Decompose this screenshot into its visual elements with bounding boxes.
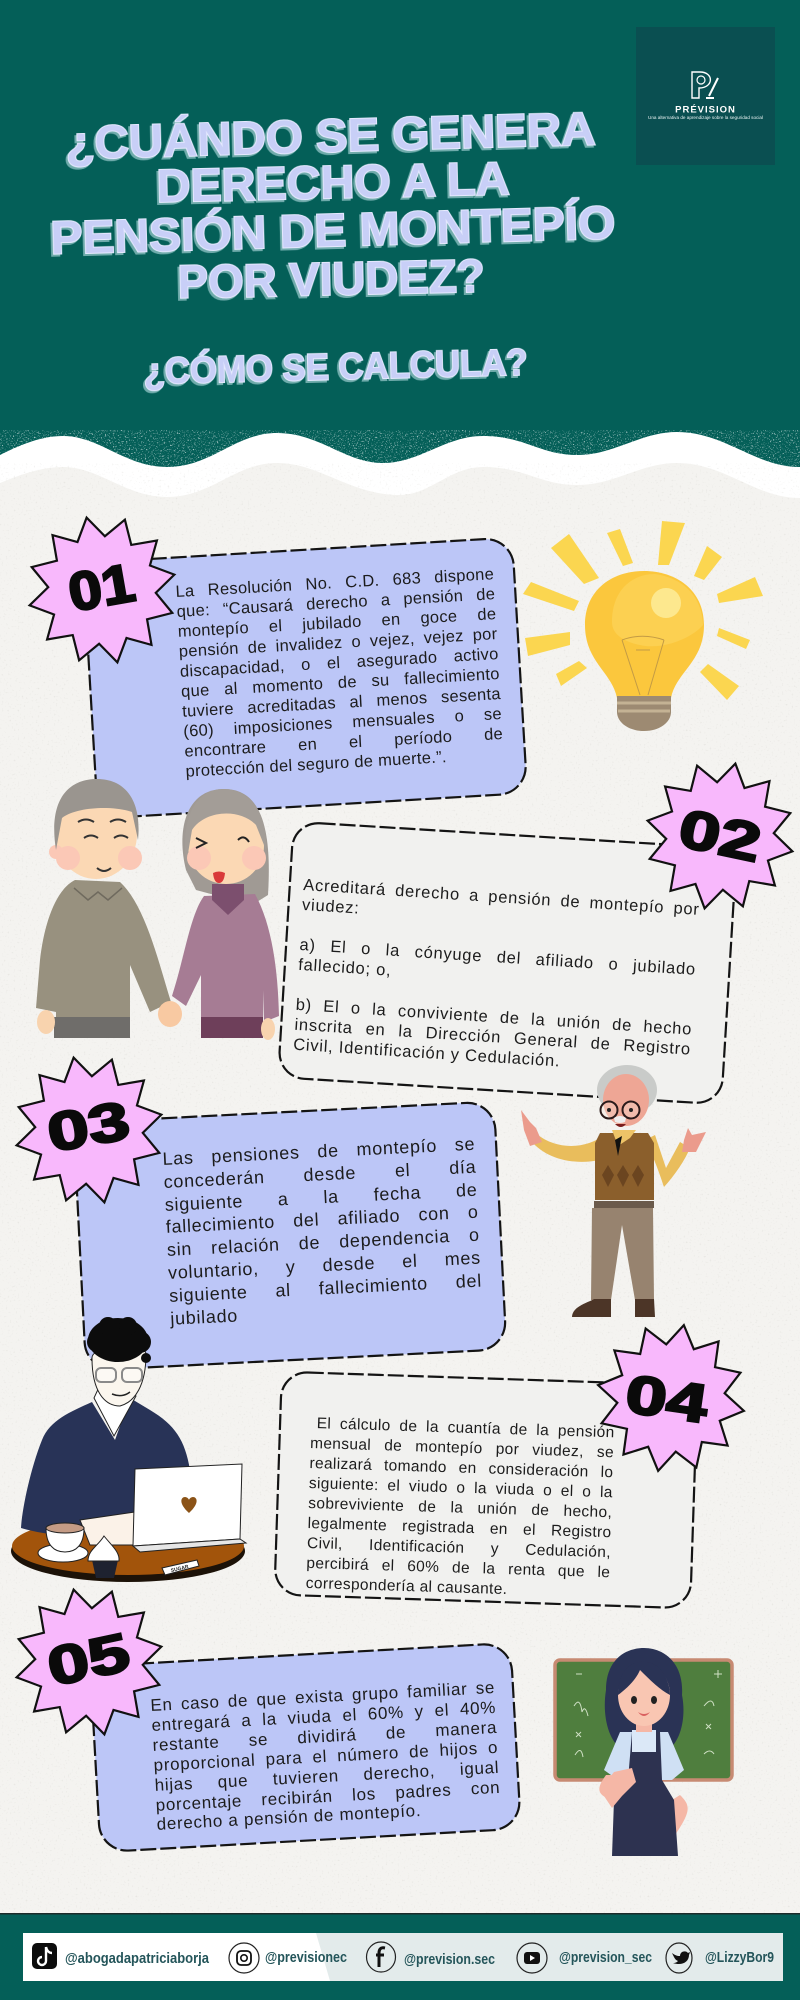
text: card 01: que: “Causará derecho a pensión de (176, 585, 496, 621)
panel: card 05 (92, 1643, 520, 1852)
twitter (666, 1943, 774, 1973)
illustration: man at laptop (11, 1317, 248, 1582)
text: card 01: encontrare en el período de (184, 725, 503, 761)
number 02: 02 (674, 798, 766, 874)
illustration: professor (521, 1065, 706, 1317)
logo: Prévision: PRÉVISION (675, 104, 736, 116)
illustration: man at laptop: SUGAR (170, 1564, 190, 1574)
text: card 05: entregará a la viuda el 60% y el 40% (151, 1697, 497, 1734)
star badge 03 (14, 1056, 164, 1204)
logo: Prévision (636, 27, 775, 165)
number 05: 05 (42, 1622, 135, 1698)
text: card 03: Las pensiones de montepío se (162, 1133, 476, 1169)
star badge 05 (14, 1588, 164, 1736)
text: card 01: montepío el jubilado en goce de (177, 605, 497, 641)
text: card 02: fallecido; o, (298, 955, 392, 979)
text: card 03: sin relación de dependencia o (167, 1224, 480, 1260)
instagram: @previsionec (265, 1949, 347, 1966)
illustration: teacher at chalkboard (553, 1648, 734, 1856)
text: card 01: protección del seguro de muerte.”. (185, 748, 447, 781)
text: card 03: fallecimiento del afiliado con o (165, 1202, 479, 1237)
text: card 02: b) El o la conviviente de la unión de hecho (295, 995, 693, 1038)
twitter: @LizzyBor9 (705, 1949, 774, 1966)
youtube (517, 1943, 652, 1973)
text: card 02: viudez: (302, 895, 360, 917)
text: card 04: Civil, Identificación y Cedulación, (306, 1535, 611, 1561)
text: card 04: realizará tomando en consideración lo (309, 1455, 613, 1481)
text: card 02: Acreditará derecho a pensión de montepío por (303, 875, 700, 918)
text: card 01: pensión de invalidez o vejez, vejez por (178, 625, 498, 661)
man (36, 779, 182, 1038)
icon: light bulb with rays (523, 521, 763, 731)
title (50, 102, 616, 394)
text: card 02: Civil, Identificación y Cedulación. (293, 1035, 561, 1070)
text: card 04: sobreviviente de la unión de hecho, (308, 1495, 612, 1521)
text: card 05: En caso de que exista grupo familiar se (150, 1677, 496, 1714)
text: card 01: que al momento de su fallecimiento (181, 665, 500, 701)
star badge 04 (596, 1323, 746, 1473)
text: card 04 (305, 1415, 614, 1598)
text: card 05: porcentaje recibirán los padres con (155, 1777, 501, 1814)
facebook: @prevision.sec (404, 1951, 495, 1968)
woman (172, 789, 279, 1040)
logo: Prévision: Una alternativa de aprendizaje sobre la seguridad social (648, 115, 763, 120)
star badge 02 (646, 762, 794, 910)
text: card 01 (175, 565, 503, 781)
text: card 05: restante se dividirá de manera (152, 1717, 498, 1754)
title: ¿CUÁNDO SE GENERA (65, 102, 596, 169)
number 03: 03 (43, 1090, 134, 1164)
text: card 04: mensual de montepío por viudez, se (309, 1435, 614, 1461)
text: card 01: tuviere acreditadas al menos sesenta (182, 685, 501, 721)
star badge 01 (28, 516, 176, 664)
text: card 05 (150, 1677, 501, 1834)
text: card 04: siguiente: el viudo o la viuda o el o la (308, 1475, 612, 1501)
text: card 04: percibirá el 60% de la renta que le (306, 1555, 610, 1581)
text: card 02 (293, 875, 700, 1070)
text: card 02: a) El o la cónyuge del afiliado o jubilado (299, 935, 696, 978)
text: card 01: discapacidad, o el asegurado activo (180, 645, 499, 681)
number 04: 04 (622, 1364, 712, 1435)
text: card 05: hijas que tuvieren derecho, igual (154, 1757, 500, 1794)
text: card 01: (60) imposiciones mensuales o se (183, 705, 502, 741)
number 01: 01 (64, 553, 139, 623)
tiktok (32, 1943, 210, 1969)
text: card 04: legalmente registrada en el Registro (307, 1515, 611, 1541)
text: card 03: voluntario, y desde el mes (168, 1247, 481, 1282)
text: card 03: siguiente al fallecimiento del (169, 1270, 482, 1305)
title: DERECHO A LA (156, 152, 510, 212)
panel: card 03 (76, 1102, 506, 1368)
footer: social media bar (0, 1913, 800, 2000)
instagram (229, 1943, 347, 1973)
text: card 05: proporcional para el número de hijos o (153, 1737, 499, 1774)
title: POR VIUDEZ? (177, 250, 485, 308)
panel: card 01 (87, 538, 527, 818)
tiktok: @abogadapatriciaborja (65, 1950, 210, 1967)
youtube: @prevision_sec (559, 1949, 652, 1966)
text: card 03: siguiente a la fecha de (164, 1179, 478, 1214)
text: card 03 (162, 1133, 482, 1328)
panel: card 04 (274, 1371, 696, 1609)
text: card 03: concederán desde el día (163, 1156, 477, 1191)
text: card 04: El cálculo de la cuantía de la pensión (316, 1415, 614, 1441)
text: card 03: jubilado (170, 1305, 238, 1328)
text: card 05: derecho a pensión de montepío. (156, 1801, 422, 1834)
panel: card 02 (278, 822, 735, 1104)
title: PENSIÓN DE MONTEPÍO (50, 196, 616, 264)
text: card 04: correspondería al causante. (305, 1575, 507, 1598)
text: card 02: inscrita en la Dirección General de Registro (294, 1015, 691, 1058)
facebook (366, 1942, 495, 1972)
illustration: elderly couple (36, 779, 279, 1040)
text: card 01: La Resolución No. C.D. 683 dispone (175, 565, 495, 601)
subtitle: ¿CÓMO SE CALCULA? (143, 341, 528, 392)
